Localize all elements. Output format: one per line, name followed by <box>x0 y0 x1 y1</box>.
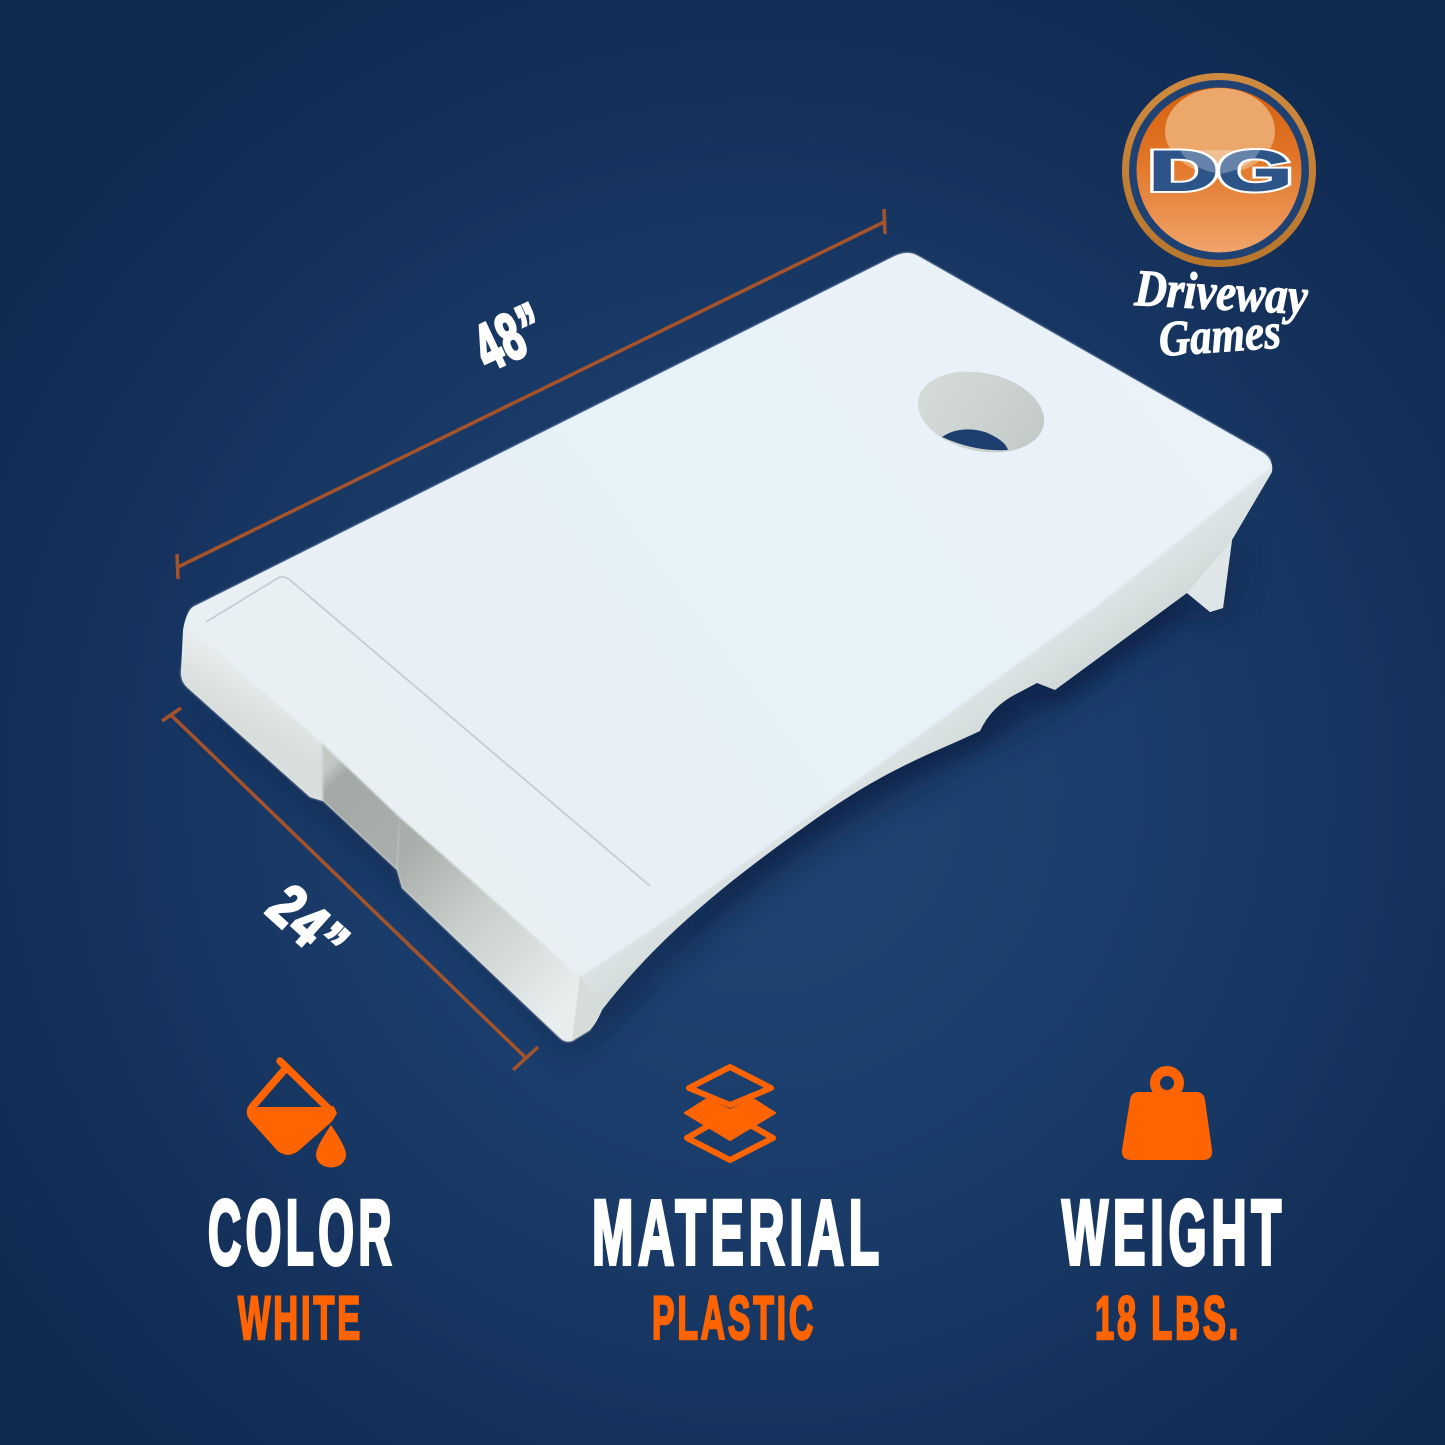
dimension label: 48 inches: 48” <box>463 288 557 385</box>
logo badge <box>1122 73 1316 267</box>
icon: weight <box>1122 1066 1212 1160</box>
logo badge: DG <box>1149 139 1292 202</box>
column: weight <box>1062 1066 1286 1352</box>
icon: layers <box>685 1067 775 1160</box>
dimension label: 24 inches: 24” <box>255 872 363 978</box>
value: white: WHITE <box>238 1284 363 1352</box>
logo badge: DG <box>1149 139 1292 202</box>
icon: paint bucket <box>250 1061 346 1168</box>
dimension line: 24 inches <box>162 708 538 1070</box>
cornhole hole <box>910 361 1052 463</box>
column: material <box>592 1067 884 1352</box>
board contact shadow <box>612 590 1190 1020</box>
value: plastic: PLASTIC <box>652 1284 816 1352</box>
board shadow <box>190 540 1250 1055</box>
rear leg <box>1187 540 1232 612</box>
left end face: outer section <box>397 816 590 1042</box>
see-through opening <box>942 429 1008 450</box>
front arch corner <box>572 975 602 1041</box>
left end face: lit section <box>181 625 323 801</box>
logo: Driveway Games <box>1122 73 1316 367</box>
heading: material: MATERIAL <box>592 1182 884 1284</box>
cornhole board <box>181 253 1272 1042</box>
infographic canvas: COLOR <box>208 1182 396 1284</box>
board silhouette and right side face <box>181 253 1272 1042</box>
column: color <box>208 1061 396 1352</box>
left end face: recessed handle section <box>322 743 400 870</box>
value: 18 lbs: 18 LBS. <box>1095 1284 1241 1352</box>
top face <box>188 253 1271 974</box>
logo wordmark: Driveway: Driveway <box>1133 260 1310 326</box>
icon: paint drop <box>316 1125 346 1168</box>
scoring line groove <box>206 577 650 886</box>
dimension line: 48 inches <box>177 209 885 579</box>
logo wordmark: Games: Games <box>1157 303 1282 367</box>
